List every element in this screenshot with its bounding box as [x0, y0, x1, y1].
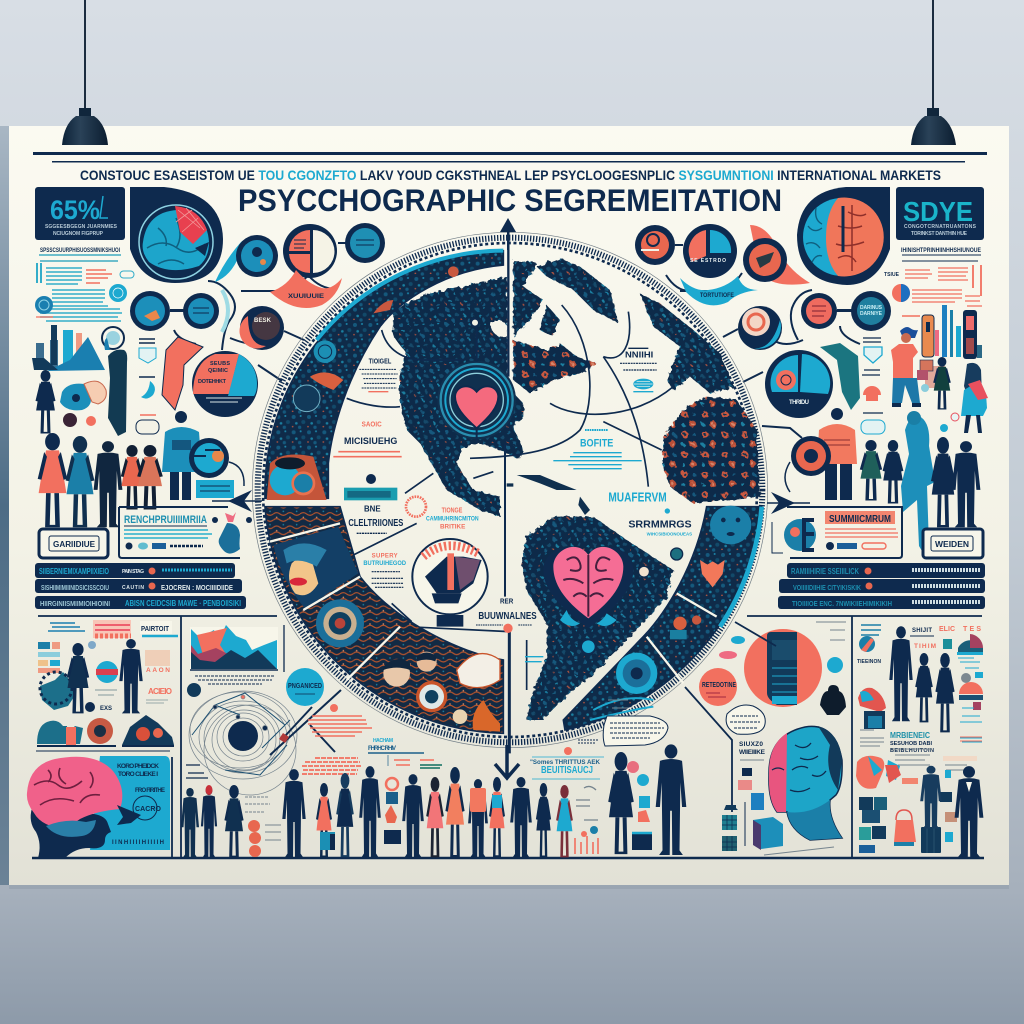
pie chart left top: [283, 224, 337, 278]
banner bars left: PAIN STAG: [122, 569, 144, 575]
text block: MUAFERVM: SRRMMRGS: [628, 519, 692, 530]
map band: upper left: [265, 251, 503, 500]
banner bars left: ABISN CEIDCSIB MAWE · PENBOIISIKI: [125, 599, 241, 608]
icon: speech circle blue: [215, 235, 278, 282]
ring border ticks: [252, 232, 768, 748]
panel: left banner: [119, 507, 252, 558]
map: Africa: [662, 397, 760, 503]
speech bubble lower: [603, 700, 668, 746]
pie chart lower right: THRIDU: [789, 400, 809, 406]
panel: brain head with cyan card: TORO CLIEKE I: [118, 771, 158, 778]
stat box: 65%: NCIUGNOM FIGPRUP: [53, 231, 104, 237]
person: navy woman lower left: [67, 643, 89, 713]
header rules: [33, 152, 987, 162]
text block: lower center coral: [186, 704, 442, 857]
arrow: vertical top head: [500, 218, 516, 250]
person: blue jacket man: [162, 411, 202, 500]
person: girl right: [961, 363, 988, 433]
group: people right: [860, 411, 980, 556]
icon: twin circles right: [801, 291, 891, 331]
panel: left banner: RENCHPRUIIIIMRIIA: [124, 514, 207, 526]
map: Caribbean islands: [507, 475, 590, 515]
panel: lower right middle: [685, 622, 846, 851]
panel: right banner: SUMMIICMRUM: [829, 514, 891, 525]
map: North America: [393, 260, 597, 517]
pen lines lower-left: [270, 690, 341, 755]
person: man blue suit lower: [920, 766, 942, 828]
icon: circle top right small: [635, 225, 683, 265]
person: navy man lower left: [119, 639, 143, 713]
pie chart lower left: QEIMIC: [208, 368, 228, 374]
panel: lower right column: TIEEINON: [857, 659, 881, 665]
arrow: horizontal left: [212, 490, 262, 512]
pie chart top right: SE ESTRDO: [690, 258, 726, 264]
connector lines inside globe: [347, 305, 673, 690]
pie chart lower right: [765, 350, 833, 418]
icon: cube: [745, 793, 783, 850]
arrow: horizontal right: [767, 492, 810, 514]
stat box: 65%: SGGEESBGEGN JUARNMIES: [45, 224, 118, 230]
person: tall robed figure: [102, 327, 127, 436]
leaf label right: [680, 276, 758, 305]
icon: speech circle coral: [743, 225, 810, 285]
label box: GARIIDIUE: [39, 529, 108, 558]
connector lines: [170, 273, 860, 450]
panel: lower left mixed infographic: PAIRTOIT: [141, 624, 169, 633]
stat box: SDYE: TORINKST DANTHIN HUE: [911, 231, 968, 237]
icon: crescent circle right: [738, 306, 782, 350]
text block: BOFITE: [553, 430, 642, 469]
text block: MICISIUEHG: [333, 420, 402, 500]
pie chart lower left: [192, 351, 258, 417]
text block: lower left inner: SUPERY: [372, 553, 398, 559]
text tags right: [861, 338, 959, 434]
icon: brain circle left: [130, 187, 223, 283]
person: man black suit lower: [955, 766, 983, 857]
pie chart lower left: SEUBS: [210, 361, 230, 367]
text block: MICISIUEHG: MICISIUEHG: [344, 436, 397, 446]
central globe graphic: [252, 230, 768, 753]
text block: BUUWNALNES: [476, 596, 543, 662]
icon: blue brain blob: [60, 381, 106, 427]
panel: lower right column: [856, 625, 983, 853]
text block: left under stat: [35, 247, 134, 321]
panel: lower right column: SESUHOB DABI: [890, 741, 932, 747]
panel: lower right column: SHIJIT: [912, 628, 932, 634]
pie chart top right: [683, 224, 737, 278]
text block: NNIIHI: NNIIHI: [625, 349, 653, 359]
diagram: radial orbit: [189, 691, 297, 795]
map: South America: [522, 517, 673, 720]
text block: CLELTRIIONES: TIONGE: [442, 506, 462, 515]
banner bars left: [35, 563, 246, 609]
stat box: 65%: 65%: [50, 195, 100, 225]
illustration: skyline and mountain: [32, 325, 105, 371]
text block: lower left inner: BUTRUIHEGOD: [363, 560, 406, 567]
icon: brain circle right: [797, 187, 890, 285]
stat box: 65%: [35, 187, 125, 240]
icon: bulb with fan hand: [412, 539, 488, 627]
poster sheet: [0, 126, 1009, 889]
icon: crescent circle left: [212, 306, 284, 358]
banner bars right: [778, 563, 985, 609]
panel: brain head with cyan card: KORO PHEIDCK: [117, 763, 159, 770]
banner bars left: EJOCREN : MOCIIIIDIIDE: [161, 583, 233, 592]
panel: brain head with cyan card: [27, 756, 170, 858]
text block: bottom center right: BEUITISAUCJ: [541, 765, 593, 776]
stat box: SDYE: CONGOTCRNATRUANTONS: [904, 224, 977, 230]
text tags left: [136, 339, 159, 434]
label box: GARIIDIUE: GARIIDIUE: [53, 540, 96, 549]
arrow: vertical bottom head: [495, 745, 519, 778]
panel: lower right middle: WIIEIIIKE: [739, 749, 766, 756]
panel: lower right middle: RETEDOTINE: [702, 682, 736, 689]
panel: lower right middle: SIUXZ0: [739, 741, 763, 748]
stat box: SDYE: SDYE: [903, 196, 973, 227]
icon: cyan circle label: PNGANICED: [288, 681, 322, 690]
text block: lower center coral: HACHAM: [373, 738, 393, 744]
text block: bottom center right: "Somes THRITTUS AEK: [530, 759, 600, 766]
icon: twin circles right: DARINUS: [860, 305, 883, 311]
stat box: SDYE: [896, 187, 984, 240]
panel: lower right column: MRBIENEIC: [890, 731, 930, 740]
panel: lower right column: BEIBLHUITOIN: [890, 748, 934, 754]
panel: lower right column: TIHIM: [914, 643, 936, 650]
group: people left: [38, 433, 163, 527]
banner bars left: CAUTIN: [122, 585, 144, 591]
map: Europe and Asia: [640, 293, 733, 393]
bar chart: buildings right: [922, 305, 982, 359]
icon: circle top left: [338, 223, 385, 263]
icon: heart brain south: [543, 546, 633, 654]
banner bars right: VOIIIIIDIIHIE CITYIKISKIK: [793, 583, 861, 592]
person: tall man right of center: [656, 744, 686, 855]
text block: CLELTRIIONES: BRITIKE: [440, 525, 465, 531]
person: coral back man: [785, 408, 857, 500]
text block: right under stat: [884, 247, 982, 316]
leaf label right: TORTUTIOFE: [700, 293, 734, 299]
text block: TIOIGEL: TIOIGEL: [369, 356, 392, 365]
text block: lower center coral: FHRHC RHIV: [368, 746, 396, 752]
panel: lower right column: TES: [963, 626, 981, 633]
text block: NNIIHI: [620, 348, 657, 392]
text block: right under stat: TSIUE: [884, 272, 900, 278]
panel: brain head with cyan card: CACRO: [135, 806, 162, 813]
panel: lower left mixed infographic: ACIEIO: [148, 687, 172, 696]
text block: CLELTRIIONES: BNE: [364, 505, 381, 514]
person: woman lower right column B: [935, 653, 955, 732]
person: coral shirt man right: [891, 327, 921, 407]
panel: lower left mixed infographic: EXS: [100, 706, 112, 712]
text block: MUAFERVM: [608, 491, 692, 577]
group: people bottom row left: [181, 766, 381, 857]
panel: lower right column: ELIC: [939, 626, 955, 633]
person: woman lower right column A: [915, 653, 933, 722]
leaf label left: [270, 270, 342, 308]
panel: right banner: [772, 507, 902, 558]
text block: bottom center right: [530, 740, 604, 854]
label box: WEIDEN: [923, 529, 983, 558]
icon: hanging lamp right: [911, 0, 956, 145]
person: man lower right column: [889, 626, 913, 721]
leaf label left: XUUIUUIE: [288, 293, 325, 300]
label box: WEIDEN: WEIDEN: [935, 539, 969, 549]
text block: lower left inner: [363, 553, 406, 587]
text block: right under stat: IHINISHTPRINHIINHHSHIUNOUE: [901, 247, 982, 254]
text block: CLELTRIIONES: CLELTRIIONES: [348, 518, 404, 529]
text block: CLELTRIIONES: [348, 497, 479, 533]
text block: CLELTRIIONES: CAMMUHRINCMITON: [426, 517, 479, 523]
title: PSYCCHOGRAPHIC SEGREMEITATION: [238, 182, 782, 218]
text block: MICISIUEHG: SAOIC: [362, 420, 382, 429]
banner bars left: SISHIIMIMIIINIDSICISSCOIU: [41, 585, 109, 592]
text block: BUUWNALNES: RER: [500, 596, 514, 605]
arrow: coral left: [162, 337, 203, 410]
text block: TIOIGEL: [359, 356, 398, 392]
group: people bottom row middle: [402, 767, 573, 857]
text block: BUUWNALNES: BUUWNALNES: [478, 611, 537, 622]
map band: lower left: [265, 507, 503, 733]
icon: split face head: [764, 726, 842, 855]
pie chart lower left: DOTEHHKT: [198, 379, 227, 385]
subtitle: CONSTOUC ESASEISTOM UE TOU CGONZFTO LAKV YOUD CGKSTHNEAL LEP PSYCLOOGESNPLIC SYSGUMNTIONI INTERNATIONAL MARKETS: [80, 168, 941, 183]
panel frame rules: [32, 616, 984, 858]
banner bars right: TIOIIIIOE ENC. 7NWIKIIEHIMIKIKIH: [792, 599, 892, 608]
banner bars right: RAMIIIHIRIE SSEIIILICK: [791, 567, 859, 576]
icon: twin circles left: [130, 290, 228, 332]
person: woman and items lower center-right: [608, 752, 652, 854]
text block: BOFITE: BOFITE: [580, 438, 613, 450]
icon: crescent circle left: BESK: [254, 318, 272, 324]
text block: MUAFERVM: WIHCSIBIOONOUEAS: [647, 531, 692, 536]
person: small woman left: [36, 370, 56, 433]
icon: heart rings north: [437, 319, 516, 443]
panel: brain head with cyan card: FRO FIRITHE: [135, 788, 165, 794]
banner bars left: SIIBERNIEMIXAMPIIXIEIO: [39, 567, 109, 576]
panel: lower left mixed infographic: [37, 620, 178, 746]
panel: brain head with cyan card: IINHIIIIHIIIIH: [112, 840, 164, 846]
icon: twin circles right: DARNIYE: [860, 311, 883, 317]
map band: lower right: [563, 506, 762, 730]
area chart: [187, 625, 284, 697]
icon: cyan circle label: [286, 668, 324, 706]
main vertical axis: [505, 230, 509, 753]
text block: MUAFERVM: MUAFERVM: [608, 491, 667, 505]
icon: hanging lamp left: [62, 0, 108, 145]
arrow: teal right: [820, 343, 860, 410]
person: woman right: [925, 357, 951, 410]
panel: lower left mixed infographic: AAON: [146, 667, 170, 674]
banner bars left: HIIRGINIISMIIMIOIHIOINI: [40, 601, 110, 608]
text block: left under stat: SPSSCSUURPHISUOSSMNIKSHUOI: [40, 247, 120, 254]
icon: data circle left: [189, 438, 244, 498]
map: Greenland: [537, 258, 618, 323]
